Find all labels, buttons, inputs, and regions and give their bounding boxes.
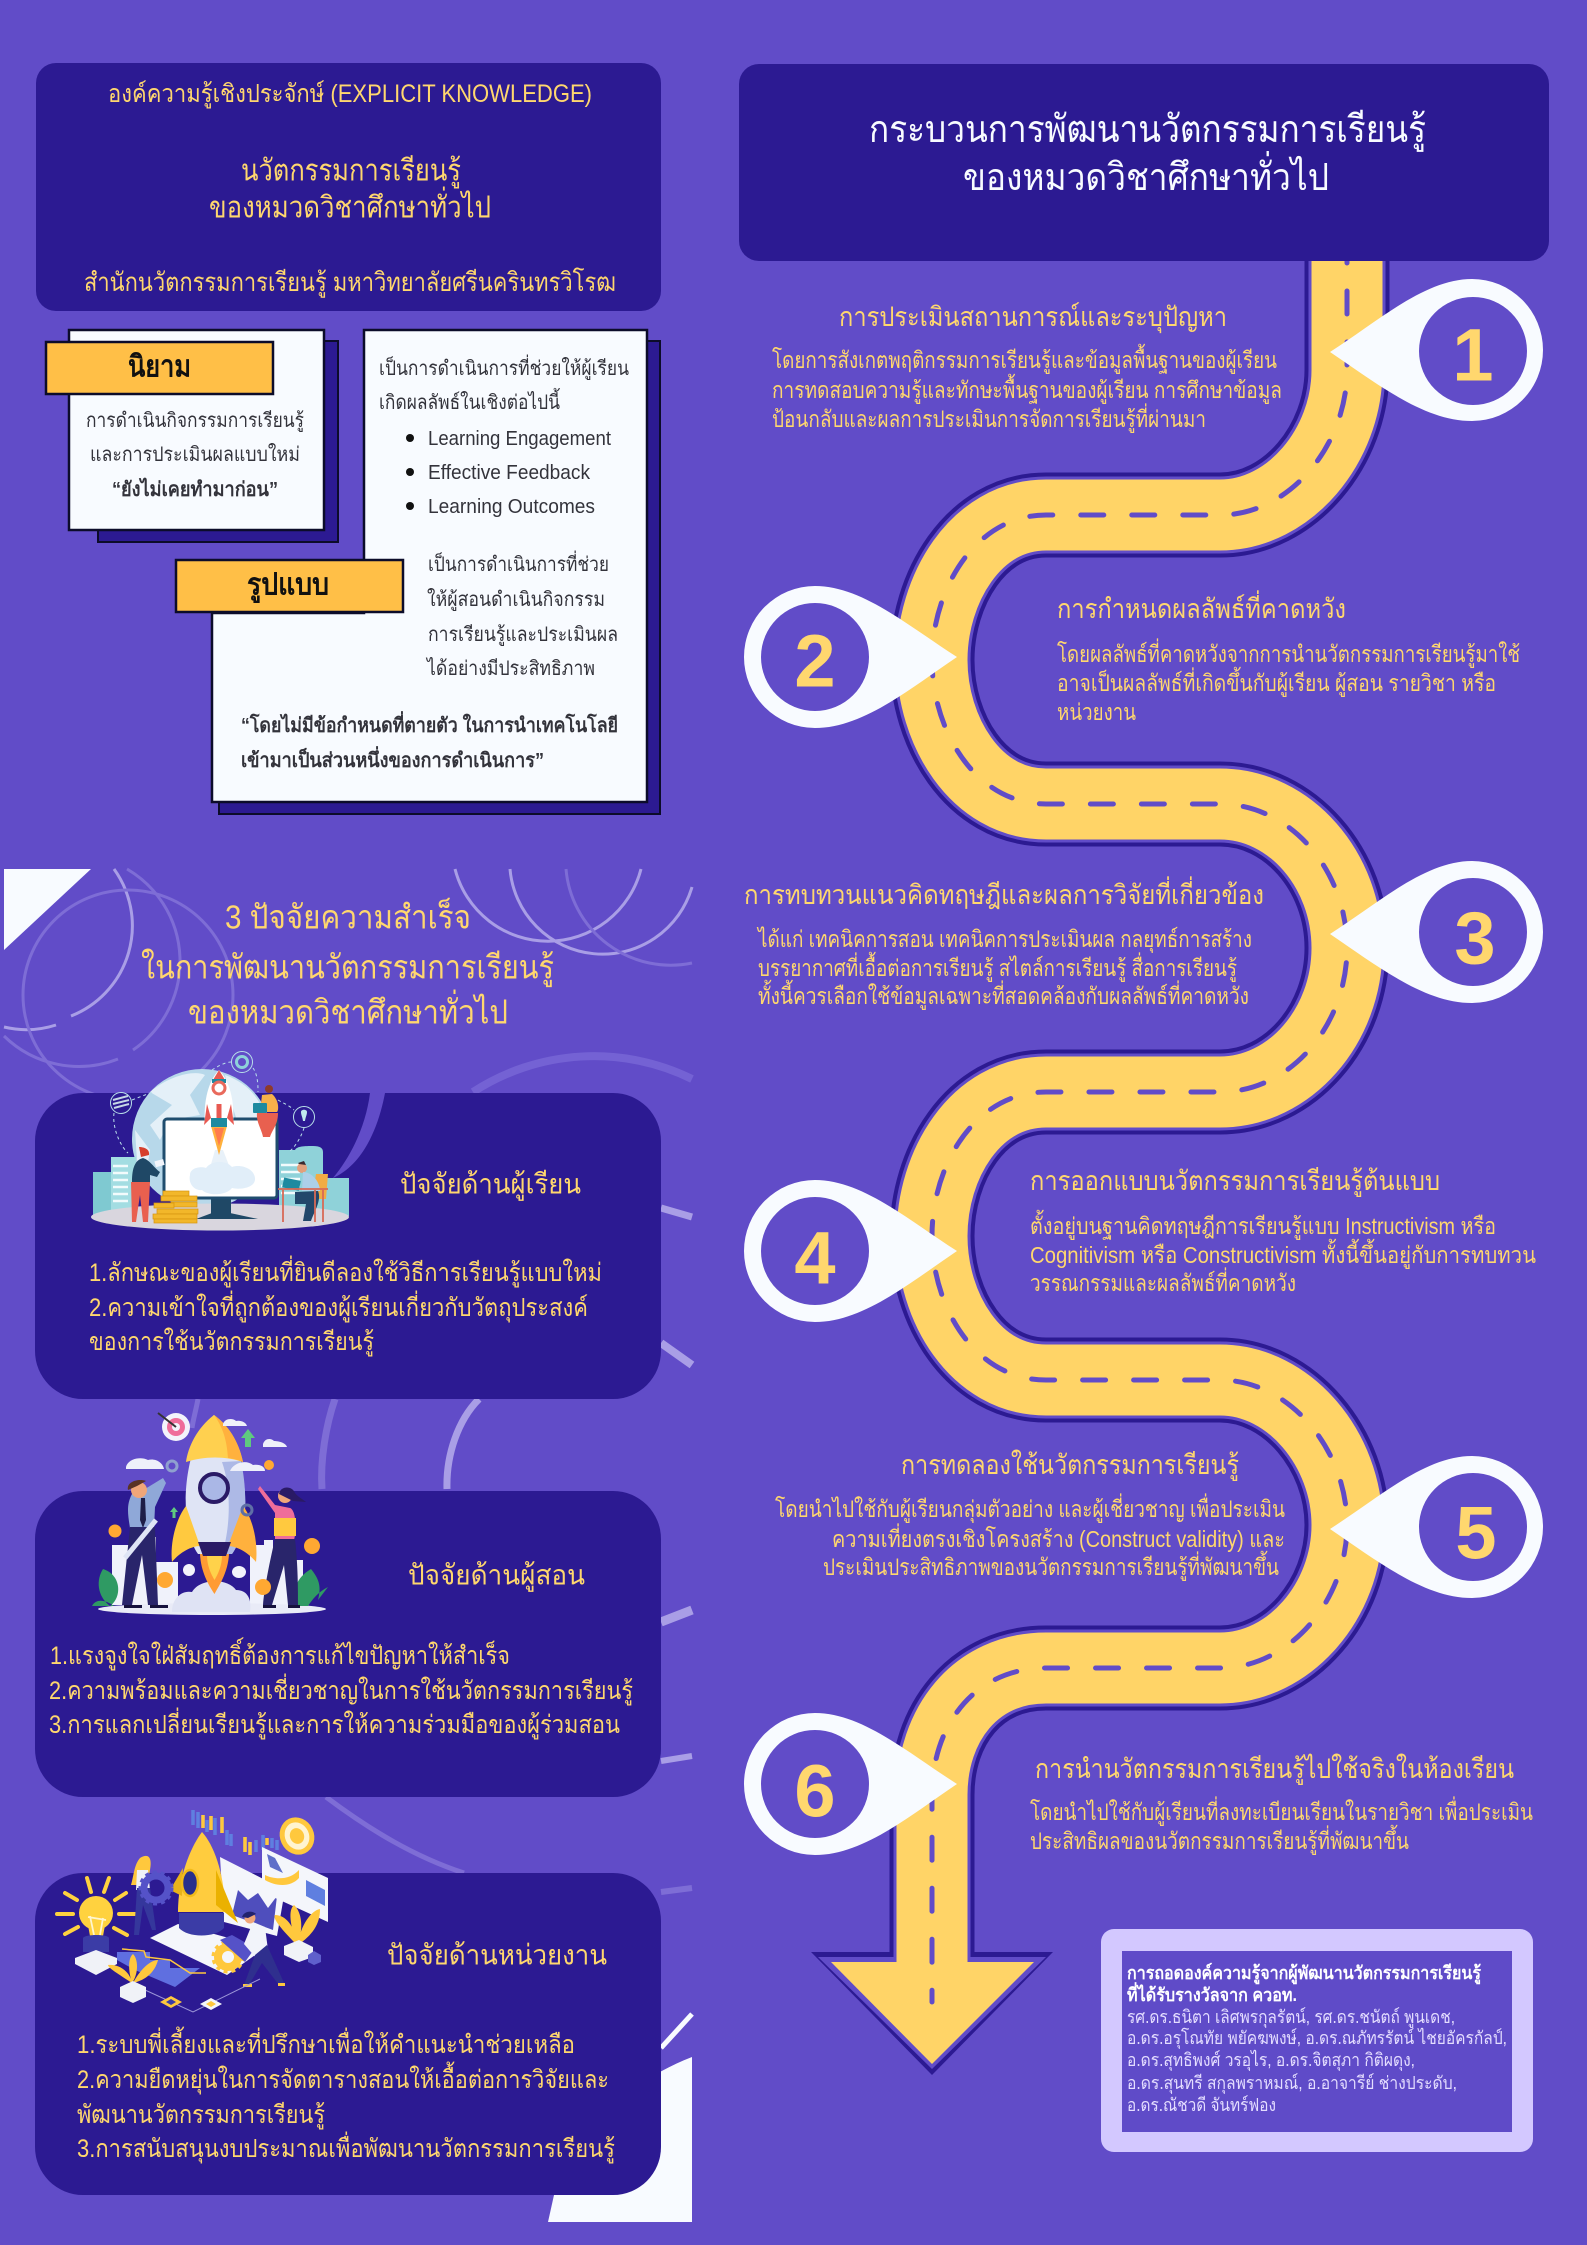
panel: definition card	[46, 330, 338, 542]
panel: teacher factors: 1.แรงจูงใจใฝ่สัมฤทธิ์ต้องการแก้ไขปัญหาให้สำเร็จ	[50, 1637, 510, 1671]
callout: knowledge contributors	[1101, 1929, 1533, 2152]
icon: team launching a rocket	[92, 1413, 328, 1615]
road: winding path with arrow	[811, 240, 1347, 2075]
text block: step 1	[772, 301, 1282, 433]
panel: format card: ให้ผู้สอนดำเนินกิจกรรม	[427, 588, 605, 612]
panel: format card: ได้อย่างมีประสิทธิภาพ	[425, 657, 595, 680]
text block: step 2: การกำหนดผลลัพธ์ที่คาดหวัง	[1057, 590, 1346, 624]
panel: learner factors: ปัจจัยด้านผู้เรียน	[400, 1168, 581, 1202]
panel: format card: Effective Feedback	[428, 462, 591, 484]
bulb	[57, 1878, 135, 1975]
target	[158, 1413, 190, 1441]
text block: step 3: การทบทวนแนวคิดทฤษฎีและผลการวิจัยที่เกี่ยวข้อง	[744, 876, 1264, 910]
panel: definition card: และการประเมินผลแบบใหม่	[90, 443, 300, 466]
heading: 3 success factors	[141, 898, 554, 1030]
panel: process title: กระบวนการพัฒนานวัตกรรมการเรียนรู้	[869, 109, 1426, 152]
panel: teacher factors: ปัจจัยด้านผู้สอน	[408, 1560, 585, 1592]
text block: step 3: บรรยากาศที่เอื้อต่อการเรียนรู้ สไตล์การเรียนรู้ สื่อการเรียนรู้	[758, 952, 1237, 982]
text block: step 1: ป้อนกลับและผลการประเมินการจัดการเรียนรู้ที่ผ่านมา	[772, 403, 1206, 433]
marker: step 5	[1330, 1456, 1543, 1598]
text block: step 6	[1030, 1753, 1533, 1855]
chart tiles	[117, 1949, 260, 2012]
text block: step 1: การทดสอบความรู้และทักษะพื้นฐานของผู้เรียน การศึกษาข้อมูล	[772, 374, 1282, 404]
panel: process title	[739, 64, 1549, 261]
callout: knowledge contributors: รศ.ดร.ธนิตา เลิศพรกุลรัตน์, รศ.ดร.ชนัตถ์ พูนเดช,	[1127, 2007, 1455, 2028]
seated woman with laptop	[253, 1085, 278, 1137]
text block: step 3: ทั้งนี้ควรเลือกใช้ข้อมูลเฉพาะที่สอดคล้องกับผลลัพธ์ที่คาดหวัง	[758, 980, 1249, 1010]
man with wrench	[122, 1478, 166, 1605]
heading: 3 success factors: 3 ปัจจัยความสำเร็จ	[225, 898, 471, 936]
marker: step 6	[744, 1713, 957, 1855]
callout: knowledge contributors: ที่ได้รับรางวัลจาก ควอท.	[1127, 1982, 1297, 2005]
text block: step 1: โดยการสังเกตพฤติกรรมการเรียนรู้และข้อมูลพื้นฐานของผู้เรียน	[772, 344, 1277, 374]
panel: organization factors: พัฒนานวัตกรรมการเรียนรู้	[77, 2101, 325, 2130]
panel: format card	[176, 330, 660, 814]
panel: format card: รูปแบบ	[247, 568, 329, 604]
coins stack	[153, 1191, 198, 1223]
text block: step 4: การออกแบบนวัตกรรมการเรียนรู้ต้นแบบ	[1030, 1166, 1440, 1197]
marker: step 1	[1330, 279, 1543, 421]
panel: explicit knowledge header: นวัตกรรมการเรียนรู้	[241, 154, 461, 188]
floating idea icons	[110, 1052, 314, 1153]
callout: knowledge contributors: อ.ดร.อรุโณทัย พยัคฆพงษ์, อ.ดร.ณภัทรรัตน์ ไชยอัครกัลป์,	[1127, 2027, 1507, 2049]
marker: step 4	[744, 1180, 957, 1322]
standing woman with tablet	[131, 1147, 165, 1222]
panel: format card: เป็นการดำเนินการที่ช่วย	[428, 550, 609, 576]
panel: format card: Learning Outcomes	[428, 496, 595, 518]
coins	[108, 1460, 320, 1595]
woman with folder	[258, 1486, 306, 1605]
arrows and clouds	[241, 1429, 255, 1447]
panel: process title: ของหมวดวิชาศึกษาทั่วไป	[963, 151, 1329, 199]
background pattern of the factors section	[4, 869, 692, 2222]
text block: step 5: โดยนำไปใช้กับผู้เรียนกลุ่มตัวอย่าง และผู้เชี่ยวชาญ เพื่อประเมิน	[775, 1493, 1285, 1523]
gear and man	[213, 1912, 285, 1987]
panel: format card: เป็นการดำเนินการที่ช่วยให้ผู้เรียน	[379, 354, 629, 381]
panel: organization factors	[35, 1873, 661, 2195]
text block: step 2: หน่วยงาน	[1057, 699, 1136, 725]
text block: step 4: วรรณกรรมและผลลัพธ์ที่คาดหวัง	[1030, 1267, 1296, 1296]
panel: organization factors: ปัจจัยด้านหน่วยงาน	[387, 1940, 607, 1970]
callout: knowledge contributors: อ.ดร.สุทธิพงศ์ วรอุไร, อ.ดร.จิตสุภา กิติผดุง,	[1127, 2049, 1415, 2071]
panel: explicit knowledge header: ของหมวดวิชาศึกษาทั่วไป	[209, 186, 491, 224]
panel: explicit knowledge header: สำนักนวัตกรรมการเรียนรู้ มหาวิทยาลัยศรีนครินทรวิโรฒ	[84, 267, 616, 298]
panel: format card: “โดยไม่มีข้อกำหนดที่ตายตัว ในการนำเทคโนโลยี	[241, 710, 618, 737]
text block: step 5	[775, 1449, 1285, 1581]
text block: step 1: การประเมินสถานการณ์และระบุปัญหา	[839, 301, 1227, 334]
marker: step 2: 2	[794, 620, 836, 702]
seated man at desk	[278, 1161, 328, 1222]
panel: learner factors: 1.ลักษณะของผู้เรียนที่ยินดีลองใช้วิธีการเรียนรู้แบบใหม่	[89, 1255, 602, 1288]
woman with gear	[131, 1856, 172, 1935]
text block: step 4: Cognitivism หรือ Constructivism ทั้งนี้ขึ้นอยู่กับการทบทวน	[1030, 1239, 1536, 1269]
left plant	[108, 1954, 158, 2003]
panel: teacher factors	[35, 1491, 661, 1797]
marker: step 5: 5	[1455, 1492, 1497, 1574]
text block: step 5: ประเมินประสิทธิภาพของนวัตกรรมการเรียนรู้ที่พัฒนาขึ้น	[823, 1551, 1279, 1581]
panel: teacher factors: 2.ความพร้อมและความเชี่ยวชาญในการใช้นวัตกรรมการเรียนรู้	[49, 1673, 633, 1706]
right plant	[274, 1905, 321, 1965]
panel: definition card: “ยังไม่เคยทำมาก่อน”	[112, 477, 278, 501]
panel: format card: การเรียนรู้และประเมินผล	[428, 624, 618, 647]
marker: step 6: 6	[794, 1750, 836, 1832]
panel: learner factors: ของการใช้นวัตกรรมการเรียนรู้	[89, 1327, 374, 1357]
text block: step 5: ความเที่ยงตรงเชิงโครงสร้าง (Construct validity) และ	[832, 1523, 1285, 1552]
text block: step 6: การนำนวัตกรรมการเรียนรู้ไปใช้จริงในห้องเรียน	[1035, 1753, 1514, 1785]
panel: format card: เข้ามาเป็นส่วนหนึ่งของการดำเนินการ”	[241, 745, 544, 772]
panel: definition card: การดำเนินกิจกรรมการเรียนรู้	[86, 410, 304, 433]
callout: knowledge contributors: อ.ดร.ณัชวดี จันทร์ฟอง	[1127, 2095, 1276, 2115]
text block: step 4	[1030, 1166, 1536, 1296]
marker: step 4: 4	[794, 1216, 836, 1300]
icon: rocket launching from a monitor in front of a globe	[91, 1052, 349, 1230]
callout: knowledge contributors: อ.ดร.สุนทรี สกุลพราหมณ์, อ.อาจารีย์ ช่างประดับ,	[1127, 2073, 1457, 2094]
panel: definition card: นิยาม	[128, 350, 191, 384]
text block: step 5: การทดลองใช้นวัตกรรมการเรียนรู้	[901, 1449, 1239, 1481]
text block: step 3	[744, 876, 1264, 1010]
text block: step 4: ตั้งอยู่บนฐานคิดทฤษฎีการเรียนรู้แบบ Instructivism หรือ	[1030, 1210, 1496, 1240]
panel: learner factors: 2.ความเข้าใจที่ถูกต้องของผู้เรียนเกี่ยวกับวัตถุประสงค์	[89, 1290, 588, 1323]
text block: step 6: ประสิทธิผลของนวัตกรรมการเรียนรู้ที่พัฒนาขึ้น	[1030, 1825, 1409, 1855]
panel: organization factors: 2.ความยืดหยุ่นในการจัดตารางสอนให้เอื้อต่อการวิจัยและ	[77, 2061, 609, 2095]
icon: isometric rocket, laptop and gears	[57, 1810, 328, 2012]
text block: step 2: อาจเป็นผลลัพธ์ที่เกิดขึ้นกับผู้เรียน ผู้สอน รายวิชา หรือ	[1057, 667, 1496, 697]
panel: explicit knowledge header	[36, 63, 661, 311]
text block: step 3: ได้แก่ เทคนิคการสอน เทคนิคการประเมินผล กลยุทธ์การสร้าง	[756, 926, 1252, 953]
panel: organization factors: 1.ระบบพี่เลี้ยงและที่ปรึกษาเพื่อให้คำแนะนำช่วยเหลือ	[77, 2026, 575, 2059]
marker: step 3: 3	[1454, 896, 1496, 980]
panel: format card: เกิดผลลัพธ์ในเชิงต่อไปนี้	[379, 388, 560, 414]
marker: step 1: 1	[1452, 314, 1494, 396]
text block: step 2	[1057, 590, 1520, 725]
heading: 3 success factors: ของหมวดวิชาศึกษาทั่วไป	[188, 990, 508, 1030]
callout: knowledge contributors: การถอดองค์ความรู้จากผู้พัฒนานวัตกรรมการเรียนรู้	[1127, 1962, 1481, 1985]
marker: step 3	[1330, 861, 1543, 1003]
heading: 3 success factors: ในการพัฒนานวัตกรรมการเรียนรู้	[141, 948, 554, 988]
panel: learner factors	[35, 1093, 661, 1399]
panel: teacher factors: 3.การแลกเปลี่ยนเรียนรู้และการให้ความร่วมมือของผู้ร่วมสอน	[49, 1707, 620, 1740]
panel: explicit knowledge header: องค์ความรู้เชิงประจักษ์ (EXPLICIT KNOWLEDGE)	[108, 80, 592, 109]
panel: organization factors: 3.การสนับสนุนงบประมาณเพื่อพัฒนานวัตกรรมการเรียนรู้	[77, 2131, 615, 2164]
panel: format card: Learning Engagement	[428, 428, 611, 450]
marker: step 2	[744, 586, 957, 728]
